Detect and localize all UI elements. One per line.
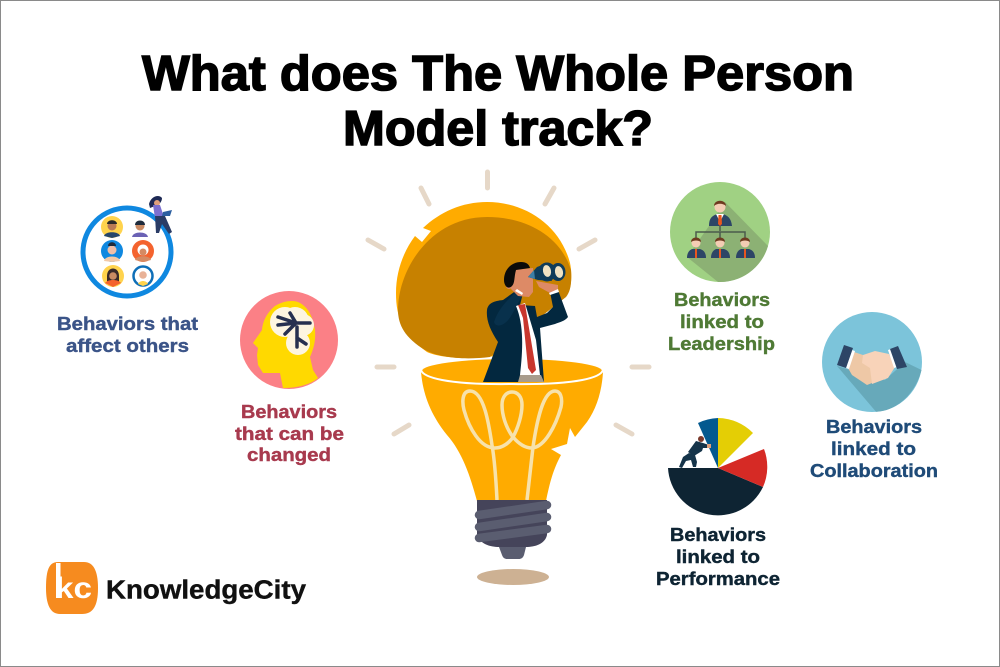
panel: behaviors linked to leadership: [668, 182, 775, 354]
label: [57, 314, 198, 356]
hair: [504, 262, 530, 288]
label: that can be: [235, 424, 344, 444]
label: changed: [247, 445, 331, 465]
label: Leadership: [668, 334, 775, 354]
light rays around bulb: [368, 172, 649, 434]
leader figure: [709, 201, 732, 226]
label: [668, 290, 775, 354]
panel: behaviors linked to collaboration: [810, 312, 938, 481]
raised hand: [536, 281, 558, 293]
label: linked to: [831, 439, 916, 459]
red tie: [518, 304, 536, 374]
label: Behaviors: [826, 417, 922, 437]
label: [235, 402, 344, 465]
filament: [463, 391, 562, 500]
bulb rim highlight: [421, 370, 603, 384]
woman with laptop: [149, 196, 172, 234]
bulb shadow: [477, 569, 549, 585]
panel: behaviors that can be changed: [235, 291, 344, 465]
trousers: [518, 375, 544, 382]
central light bulb illustration: [396, 202, 603, 585]
label: linked to: [680, 312, 764, 332]
jacket: [483, 290, 568, 382]
binoculars: [528, 262, 566, 282]
label: Behaviors: [670, 525, 766, 545]
shirt: [516, 303, 540, 375]
label: linked to: [676, 547, 760, 567]
icon: man pushing pie slice: [679, 436, 711, 468]
icon: people circle: [83, 196, 172, 296]
label: Behaviors: [674, 290, 770, 310]
title: What does The Whole Person: [142, 47, 854, 101]
bulb base glass: [421, 359, 603, 501]
icon: org chart: [670, 182, 770, 282]
businessman with binoculars: [483, 262, 568, 382]
label: Performance: [656, 569, 780, 589]
logo wordmark: KnowledgeCity: [106, 576, 307, 604]
icon: head with brain: [240, 291, 338, 389]
logo mark: [46, 562, 98, 614]
avatars: [101, 216, 154, 287]
label: affect others: [66, 336, 189, 356]
label: Behaviors: [241, 402, 337, 422]
label: Collaboration: [810, 461, 938, 481]
panel: behaviors linked to performance: [656, 418, 780, 589]
head: [511, 268, 533, 297]
title: Model track?: [343, 102, 653, 156]
pie chart: [668, 418, 767, 515]
logo: KnowledgeCity: [46, 562, 307, 614]
label: [810, 417, 938, 481]
title: [142, 47, 854, 156]
open bulb dome: [396, 202, 571, 358]
label: [656, 525, 780, 589]
ear: [506, 283, 512, 289]
icon: handshake: [822, 312, 922, 412]
panel: behaviors that affect others: [57, 196, 198, 356]
logo mark: kc: [55, 572, 92, 605]
screw base: [477, 500, 547, 559]
team figures: [687, 238, 755, 258]
label: Behaviors that: [57, 314, 198, 334]
